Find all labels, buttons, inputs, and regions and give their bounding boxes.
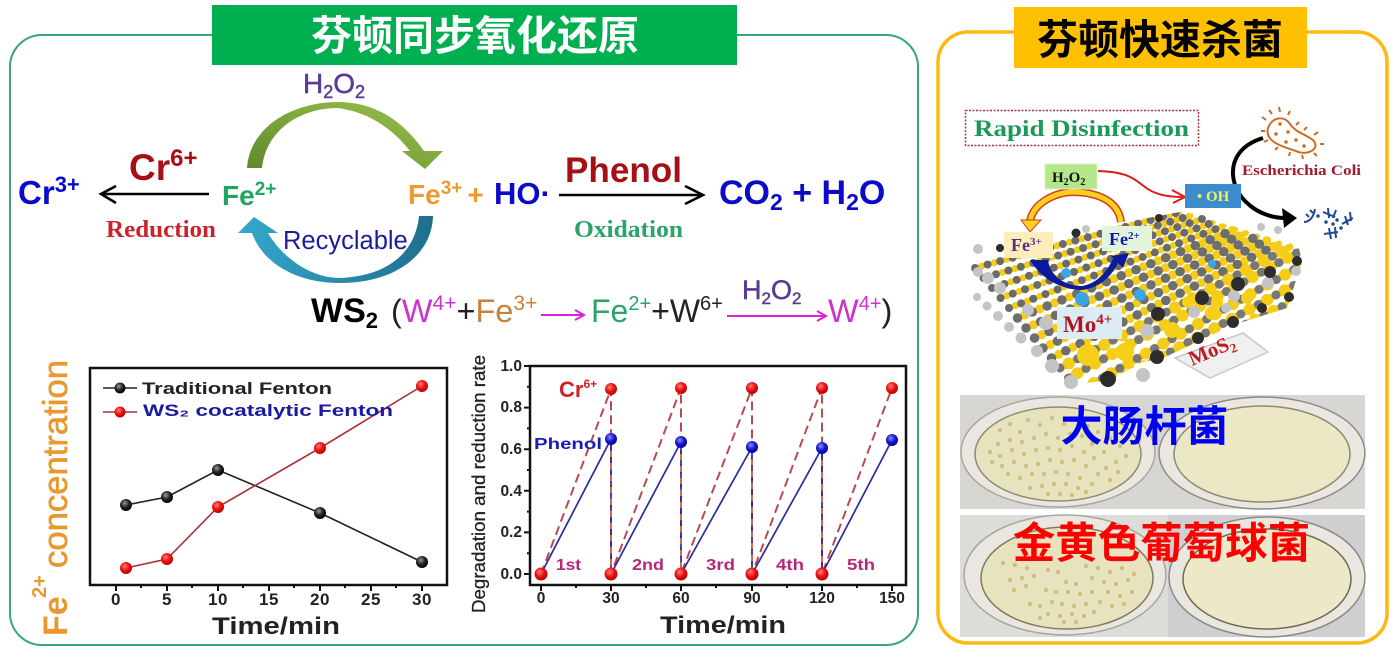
cycle labels: 5th	[847, 557, 875, 574]
label: S. aureus: 金黄色葡萄球菌	[1013, 510, 1310, 571]
oxidation pathway	[559, 151, 885, 243]
x axis tick labels	[111, 590, 432, 609]
y axis title: degradation and reduction rate: Degradation and reduction rate	[468, 355, 489, 613]
label: products: 2	[770, 189, 783, 215]
y axis tick labels: 0.4	[500, 483, 522, 500]
icon: E. coli bacterium	[1261, 107, 1324, 159]
x axis tick labels: 5	[162, 590, 172, 609]
label: hydroxyl radical	[1185, 184, 1241, 208]
x axis tick labels: 20	[310, 590, 330, 609]
y axis title: Fe2+ concentration: Fe	[37, 596, 75, 636]
label: Fe3+ plus: Fe	[408, 179, 441, 210]
equation part three: W	[828, 293, 859, 329]
label: H2O2	[1045, 164, 1097, 189]
arrow: magenta one	[541, 310, 584, 320]
label: Mo4+	[1057, 307, 1122, 339]
plate: treated, no colonies	[1159, 397, 1365, 509]
label: products: O	[859, 174, 885, 212]
label: Cr3+: Cr	[18, 174, 55, 211]
label: Mo4+: Mo	[1063, 312, 1096, 337]
schematic: MoS2 rapid disinfection	[966, 107, 1361, 390]
label: Fe2+: 2+	[255, 179, 276, 200]
label: phenol series: Phenol	[534, 436, 602, 453]
plate: control with colonies	[964, 515, 1166, 635]
label: products: CO	[719, 174, 770, 212]
y axis title: Fe2+ concentration: 2+	[29, 575, 51, 598]
equation part two: +W	[651, 293, 701, 329]
MoS2 lattice	[973, 212, 1302, 390]
label: WS2: WS	[311, 292, 366, 330]
label: products: 2	[846, 189, 859, 215]
label: Fe2+: Fe	[222, 180, 255, 211]
label: Fe2+: 2+	[1128, 230, 1140, 242]
x axis tick labels: 120	[809, 590, 835, 607]
label: H2O2 over arrow: O	[771, 275, 792, 305]
label: Fe3+ plus: +	[467, 179, 484, 210]
arrow: Fe3+ to Fe2+ recyclable	[238, 216, 433, 283]
equation part two: 2+	[628, 293, 651, 315]
label: Escherichia Coli: Escherichia Coli	[1242, 163, 1361, 179]
arrow: Fe redox yellow	[1021, 192, 1121, 232]
x axis tick labels: 15	[259, 590, 279, 609]
equation part one: Fe	[475, 293, 513, 329]
arrow: reduction	[101, 186, 209, 203]
y axis title: Fe2+ concentration	[29, 360, 75, 636]
label: Rapid Disinfection	[966, 110, 1198, 146]
label: Fe2+: Fe	[1109, 229, 1128, 249]
line chart: Fe2+ concentration over time	[90, 368, 447, 640]
x axis tick labels: 0	[111, 590, 121, 609]
arrow: Fe2+ to Fe3+	[247, 102, 443, 169]
x axis tick labels	[537, 590, 905, 607]
legend: Traditional Fenton	[142, 379, 332, 398]
cycle labels: 1st	[556, 557, 581, 574]
label: Cr6+: Cr	[129, 147, 170, 188]
series: Cr6+	[541, 382, 898, 574]
label: Mo4+: 4+	[1096, 312, 1112, 328]
label: Fe3+ plus: 3+	[441, 178, 462, 199]
label: Fe3+: 3+	[1030, 236, 1042, 248]
y axis tick labels: 0.8	[500, 399, 522, 416]
label: MoS2 plate: 2	[1228, 340, 1239, 356]
x axis tick labels: 90	[743, 590, 761, 607]
label: Cr6+: 6+	[170, 145, 198, 172]
x axis tick labels: 150	[879, 590, 905, 607]
equation part one: 4+	[433, 292, 456, 315]
label: Phenol: Phenol	[565, 151, 682, 190]
label: H2O2: H	[1052, 170, 1064, 186]
label: Fe2+	[1102, 226, 1152, 251]
baseline points	[534, 568, 828, 580]
heading: left panel	[212, 2, 737, 65]
x axis tick labels: 0	[537, 590, 545, 607]
photo: S. aureus culture plates	[960, 510, 1365, 637]
label: Oxidation: Oxidation	[574, 217, 683, 243]
y axis tick labels: 0.0	[500, 566, 522, 583]
label: Rapid Disinfection: Rapid Disinfection	[974, 116, 1189, 141]
label: H2O2 over arrow: H	[742, 275, 762, 305]
icon: dead bacteria fragments	[1304, 208, 1353, 239]
y axis title: Fe2+ concentration: concentration	[37, 360, 75, 568]
series: phenol	[541, 433, 898, 574]
y axis tick labels: 0.6	[500, 441, 522, 458]
x axis title: Time/min	[212, 613, 340, 640]
x axis title: Time/min	[660, 612, 786, 639]
series: WS2 cocatalytic Fenton	[120, 380, 428, 574]
x axis tick labels: 10	[208, 590, 228, 609]
arrow: H2O2 to hydroxyl	[1098, 171, 1185, 203]
label: H2O2 oxidant: O	[333, 68, 355, 99]
legend	[103, 379, 393, 420]
legend: WS₂ cocatalytic Fenton	[143, 401, 393, 420]
x axis tick labels: 60	[672, 590, 690, 607]
label: H2O2: 2	[1064, 177, 1069, 188]
label: H2O2 oxidant: 2	[323, 82, 333, 102]
cycle labels: 4th	[776, 557, 804, 574]
plate: control with colonies	[961, 397, 1155, 507]
reduction pathway	[18, 145, 216, 243]
panel: Fenton simultaneous redox	[10, 35, 918, 645]
label: Fe3+	[1004, 232, 1053, 258]
photo: E. coli culture plates	[960, 393, 1365, 509]
label: hydroxyl radical: • OH	[1197, 189, 1230, 205]
arrow: Fe redox blue	[1030, 253, 1129, 290]
heading: right panel: 芬顿快速杀菌	[1037, 6, 1283, 66]
arrow: black kill curve	[1233, 138, 1297, 228]
label: Cr6+ series: 6+	[583, 377, 597, 391]
label: Cr3+: 3+	[55, 172, 80, 197]
plate: treated, no colonies	[1169, 517, 1365, 637]
label: products: + H	[783, 174, 846, 212]
label: H2O2 oxidant: 2	[355, 82, 365, 102]
label: E. coli: 大肠杆菌	[1060, 393, 1229, 454]
equation part two: 6+	[700, 293, 723, 315]
label: Fe3+: Fe	[1011, 235, 1030, 255]
cycle labels: 3rd	[706, 557, 735, 574]
x axis tick labels: 25	[361, 590, 381, 609]
cycle labels	[556, 557, 875, 574]
arrow: magenta two	[727, 311, 826, 321]
label: WS2: 2	[366, 308, 378, 333]
label: H2O2: 2	[1080, 177, 1085, 188]
label: H2O2 over arrow: 2	[762, 289, 771, 308]
label: Reduction: Reduction	[106, 217, 216, 243]
equation part three: )	[882, 293, 892, 329]
reaction scheme: Fenton cycle	[222, 68, 551, 283]
label: MoS2 plate: MoS	[1185, 332, 1233, 371]
label: H2O2 oxidant: H	[303, 68, 323, 99]
equation part two: Fe	[591, 293, 628, 329]
y axis tick labels: 0.2	[500, 524, 522, 541]
label: H2O2 over arrow: 2	[792, 289, 801, 308]
WS2 cocatalytic equation	[311, 275, 892, 333]
y axis tick labels	[500, 358, 522, 583]
label: Recyclable: Recyclable	[283, 227, 408, 255]
x axis tick labels: 30	[412, 590, 432, 609]
heading: left panel: 芬顿同步氧化还原	[311, 2, 639, 62]
equation part one: +	[456, 293, 475, 329]
equation part three: 4+	[859, 293, 882, 315]
label: H2O2: O	[1069, 170, 1080, 186]
label: MoS2 plate	[1175, 330, 1268, 378]
equation part one: 3+	[513, 292, 537, 315]
arrow: oxidation	[559, 186, 703, 204]
equation part one: (W	[391, 293, 433, 329]
series: traditional Fenton	[120, 464, 428, 568]
label: hydroxyl radical: HO·	[494, 176, 551, 211]
line chart: cycling performance	[500, 358, 906, 639]
panel: Fenton rapid disinfection	[938, 32, 1387, 643]
cycle labels: 2nd	[632, 557, 664, 574]
x axis tick labels: 30	[602, 590, 620, 607]
y axis tick labels: 1.0	[500, 358, 522, 375]
label: Cr6+ series: Cr	[559, 377, 583, 402]
